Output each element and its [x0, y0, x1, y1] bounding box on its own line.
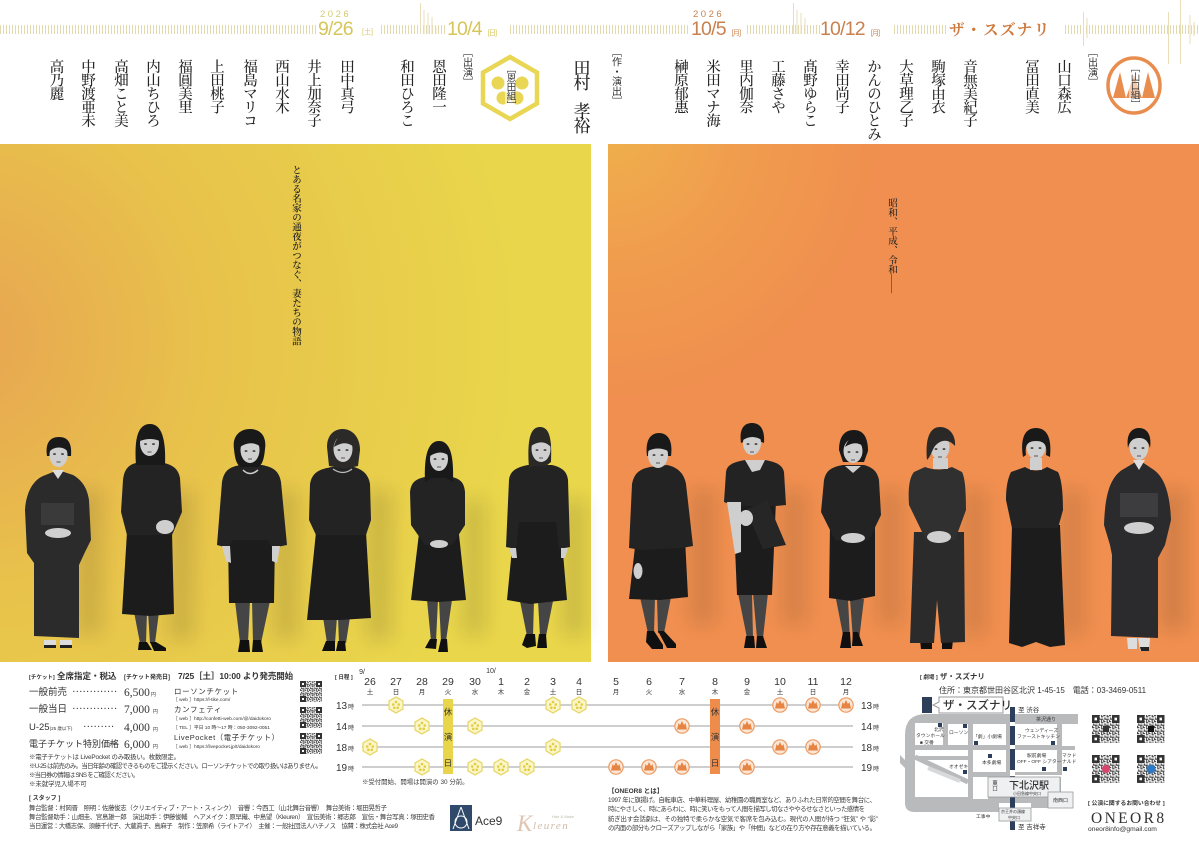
cast list: Yamaguchi team: 米田マナ海 — [704, 58, 720, 129]
map: south-west exit — [1048, 792, 1073, 808]
map: labels: ファーストキッチン — [1017, 734, 1060, 740]
map: labels: ウェンディーズ — [1025, 727, 1058, 734]
map: station: 小田急線中央口 — [1013, 790, 1041, 796]
schedule: date headers: 11 — [808, 676, 819, 688]
date: 10/4: 10/4 [日] — [447, 18, 497, 40]
schedule: closed day orange: 日 — [711, 758, 719, 768]
schedule: date headers: 27 — [390, 676, 402, 688]
ticket prices: U-25(25 歳以下) — [29, 722, 73, 733]
map: labels: ■ 交番 — [920, 739, 934, 746]
ticket prices: 7,000 円 — [124, 704, 158, 716]
schedule: closed day yellow: 休 — [444, 707, 453, 717]
cast list: Yamaguchi team: 山口森広 — [1055, 59, 1071, 115]
schedule: date headers: 6 — [646, 676, 652, 688]
schedule: date headers: 9 — [744, 676, 750, 688]
cast list: Onda team — [48, 47, 472, 128]
contact: oneor8info@gmail.com — [1088, 826, 1157, 833]
cast list: Onda team: 高畑こと美 — [112, 58, 128, 128]
schedule: closed day orange: 休 — [711, 707, 720, 717]
schedule: date headers: 火 — [646, 689, 653, 696]
map: venue callout — [933, 697, 1012, 713]
cast list: Yamaguchi team — [672, 47, 1098, 141]
schedule: date headers: 木 — [498, 687, 505, 696]
schedule: date headers: 8 — [712, 676, 718, 688]
map: station — [988, 777, 1060, 797]
date: 9/26 — [318, 9, 373, 40]
map: station: 下北沢駅 — [1009, 779, 1049, 792]
ticket vendors — [173, 687, 280, 750]
staff credits: 当日運営：大橋志保、須藤千代子、大蔵眞子、島麻子 制作：笠原希（ライトアイ） 主催：一般社団法人ハチノス 協賛：株式会社 Ace9 — [29, 821, 398, 830]
schedule: time labels: 13時 — [861, 701, 879, 712]
director name: given name: 孝裕 — [570, 102, 590, 134]
schedule: date headers: 29 — [442, 676, 454, 688]
ticket prices: 電子チケット特別価格 — [29, 738, 119, 749]
ticket vendors: ローソンチケット — [174, 687, 239, 696]
schedule: Yamaguchi team performances — [609, 698, 853, 774]
schedule: date headers: 金 — [744, 687, 751, 696]
map — [900, 697, 1078, 831]
ticket notes: ※当日券の情報は SNS をご確認ください。 — [29, 770, 139, 779]
schedule: date headers: 7 — [679, 676, 685, 688]
ticket QR codes — [300, 681, 322, 754]
about ONEOR8: 紡ぎ出す会話劇は、その独特で柔らかな空気で客席を包み込む。現代の人間が持つ “狂気” や “影” — [608, 814, 878, 823]
header: date and barcode strip — [0, 0, 1199, 64]
cast list: Yamaguchi team: 工藤さや — [769, 59, 785, 114]
venue info: 住所：東京都世田谷区北沢 1-45-15 電話：03-3469-0511 — [939, 685, 1147, 695]
ticket prices — [29, 671, 294, 751]
schedule: time labels: 18時 — [861, 743, 879, 754]
map: labels: ローソン — [949, 730, 968, 736]
schedule: note: ※受付開始、開場は開演の 30 分前。 — [362, 777, 469, 786]
ticket vendors: カンフェティ — [174, 705, 222, 714]
sponsor logo: Ace9 — [450, 805, 503, 831]
cast list: Onda team: 内山ちひろ — [144, 58, 160, 128]
figure 4: suit and long skirt — [307, 429, 392, 651]
schedule: date headers: 9/ — [359, 669, 365, 676]
map: Inokashira central exit — [999, 808, 1031, 821]
schedule: closed day yellow — [443, 699, 453, 774]
figure 5: short jacket dress — [410, 441, 486, 652]
cast list: Yamaguchi team: かんのひとみ — [865, 59, 881, 141]
ticket prices: 6,500円 — [124, 687, 156, 699]
schedule: date headers: 3 — [550, 676, 556, 688]
map: labels: 「劇」小劇場 — [973, 733, 1002, 740]
schedule: date headers: 1 — [498, 676, 504, 688]
sponsor logo: Kleuren — [516, 811, 575, 836]
schedule: date headers: 月 — [419, 688, 425, 696]
cast list: Yamaguchi team: 駒塚由衣 — [929, 59, 946, 114]
venue info — [920, 671, 1147, 695]
cast list: Yamaguchi team: 冨田直美 — [1023, 59, 1039, 114]
emblem: Yamaguchi team circle: ［山口組］ — [1128, 63, 1140, 109]
cast list: Onda team: 福圓美里 — [176, 58, 192, 114]
schedule: closed day yellow: 演 — [444, 732, 453, 742]
ticket notes: ※電子チケットは LivePocket のみ取扱い。枚数限定。 — [29, 752, 180, 761]
figure 7: suit — [629, 433, 716, 649]
date: 9/26: [土] — [362, 27, 373, 36]
about ONEOR8: 1997 年に旗揚げ。自転車店、中華料理屋、幼稚園の職員室など、ありふれた日常的空間を舞台に、 — [608, 795, 876, 804]
about ONEOR8: の内面の部分もクローズアップしながら「家族」や「仲間」などの在り方や存在意義を描いている。 — [608, 823, 876, 832]
cast list: Yamaguchi team: 大草理乙子 — [897, 59, 913, 128]
ticket prices: 一般前売 — [29, 686, 67, 698]
schedule: date headers: 木 — [712, 687, 719, 696]
venue name: ザ・スズナリ — [949, 21, 1051, 39]
social QR codes — [1092, 715, 1164, 783]
director label: ［作・演出］ — [610, 47, 622, 106]
date: 10/5: 2026 — [693, 9, 724, 20]
schedule: date headers — [359, 668, 852, 696]
ticket notes: ※U-25 は前売のみ。当日年齢の確認できるものをご提示ください。ローソンチケットでの取り扱いはありません。 — [29, 761, 322, 770]
ticket prices: 一般当日 — [29, 703, 67, 715]
ticket notes: ※未就学児入場不可 — [29, 779, 87, 788]
schedule: date headers: 日 — [810, 688, 816, 696]
cast list: Onda team: 中野渡亜未 — [79, 58, 95, 128]
map: labels: 至 吉祥寺 — [1018, 822, 1046, 831]
schedule: date headers: 10/ — [486, 668, 496, 675]
date: 10/12: 10/12 [月] — [820, 18, 880, 40]
catch copy: left: とある名家の通夜がつなぐ、妻たちの物語 — [290, 165, 302, 346]
map: labels: 駅前劇場 — [1027, 752, 1046, 759]
schedule: date headers: 日 — [393, 688, 399, 696]
ticket prices: •• — [110, 741, 117, 746]
figure 6: jacket dress — [506, 427, 586, 648]
cast list: Yamaguchi team: 髙野ゆらこ — [801, 58, 817, 127]
sponsor logo: Kleuren: Hair & Make — [552, 814, 575, 819]
about ONEOR8: 時にやさしく、時にあらわに、時に笑いをもって人間を描写し切なさややるせなさといった感情を — [608, 804, 865, 813]
figure 3: suit with pearls — [217, 429, 299, 652]
panel: yellow background — [0, 144, 591, 662]
cast list: Yamaguchi team: 幸田尚子 — [833, 58, 849, 114]
map: labels: オオゼキ — [949, 763, 968, 770]
contact: [ 公演に関するお問い合わせ ] — [1088, 799, 1165, 807]
schedule: date headers: 28 — [416, 676, 428, 688]
map: labels: 北沢 — [934, 726, 944, 733]
director name: 田村 — [570, 59, 590, 91]
map: labels: ナルド — [1062, 759, 1077, 765]
schedule: date headers: 土 — [777, 687, 784, 696]
schedule: time labels: 19時 — [336, 763, 354, 774]
schedule: date headers: 火 — [445, 689, 452, 696]
date: 9/26: 9/26 — [318, 18, 353, 40]
ticket prices: 7/25［土］10:00 より発売開始 — [178, 671, 294, 681]
schedule: date headers: 水 — [679, 687, 686, 696]
schedule: time labels: 14時 — [861, 722, 879, 733]
schedule: date headers: 土 — [550, 687, 557, 696]
schedule: time labels: 18時 — [336, 743, 354, 754]
cast list: Onda team: 和田ひろこ — [398, 59, 414, 127]
ticket prices: 4,000 円 — [124, 722, 158, 734]
cast list: Onda team: 恩田隆一 — [430, 59, 446, 113]
cast list: Onda team: 田中真弓 — [338, 59, 354, 114]
map: labels: 工事中 — [976, 813, 991, 820]
cast list: Onda team: 福島マリコ — [241, 58, 257, 126]
sponsor logo: Kleuren: leuren — [533, 820, 569, 832]
emblem: Onda team hexagon — [483, 57, 537, 119]
about ONEOR8 — [608, 787, 878, 832]
ticket prices: ••••••••••••• — [73, 689, 118, 694]
contact — [1088, 799, 1167, 833]
schedule: closed day yellow: 日 — [444, 758, 452, 768]
schedule: date headers: 日 — [576, 688, 582, 696]
map: labels: OFF・OFF シアター — [1017, 758, 1062, 765]
ticket vendors: ［ web ］http://confetti-web.com/@/daidokoro — [173, 715, 271, 722]
map: city blocks — [915, 723, 1078, 799]
emblem: Onda team hexagon: ［恩田組］ — [504, 64, 516, 110]
schedule: date headers: 12 — [840, 676, 852, 688]
ticket vendors: ［ TEL ］平日 10 時～17 時：050-3092-0051 — [173, 724, 270, 731]
figure 10: blouse and wide trousers — [909, 427, 986, 649]
figure 12: kimono — [1104, 428, 1186, 651]
schedule: time labels: 13時 — [336, 701, 354, 712]
schedule: date headers: 10 — [774, 676, 786, 688]
schedule: closed day orange — [710, 699, 720, 774]
schedule: date headers: 金 — [524, 687, 531, 696]
schedule: date headers: 月 — [843, 688, 849, 696]
venue info: [ 劇場 ] ザ・スズナリ — [920, 671, 985, 681]
staff credits: 舞台監督：村岡晋 照明：佐藤俊志（クリエイティブ・アート・スィンク） 音響：今西工（山北舞台音響） 舞台美術：堀田晃哲子 — [29, 803, 388, 812]
figures: yellow team — [25, 424, 586, 652]
map: labels: 本多劇場 — [982, 759, 1001, 766]
date: 9/26: 2026 — [320, 9, 351, 20]
map: labels: 至 渋谷 — [1018, 705, 1040, 714]
cast list: Onda team: ［出演］ — [460, 47, 472, 87]
sponsor logo: Kleuren: K — [516, 811, 534, 836]
figures: orange team — [629, 423, 1186, 651]
map: labels: マクド — [1062, 753, 1077, 759]
cast list: Onda team: 井上加奈子 — [305, 59, 321, 128]
schedule: closed day orange: 演 — [711, 732, 720, 742]
map: railway — [1010, 707, 1015, 830]
emblem: Yamaguchi team circle — [1108, 58, 1160, 113]
map: venue callout: ザ・スズナリ — [943, 698, 1012, 712]
map: labels — [916, 705, 1077, 831]
figure 9: buttoned jacket dress — [821, 430, 902, 648]
figure 8: short sleeve dress with bag — [724, 423, 806, 648]
ticket prices: ••••••••••••• — [73, 706, 118, 711]
schedule: date headers: 26 — [364, 676, 376, 688]
staff credits: [ スタッフ ] — [29, 794, 60, 802]
schedule: date headers: 月 — [613, 688, 619, 696]
ticket prices: [チケット] 全席指定・税込 — [29, 671, 117, 681]
about ONEOR8: 【ONEOR8 とは】 — [608, 787, 663, 795]
catch copy: right: 昭和、平成、令和―― — [886, 198, 898, 294]
staff credits: 舞台監督助手：山畑圭、宮島雄一郎 演出助手：伊藤俊輔 ヘアメイク：原早織、中島望（Kleuren） 宣伝美術：郷志郎 宣伝・舞台写真：塚田史香 — [29, 812, 436, 821]
schedule: date headers: 30 — [469, 676, 481, 688]
schedule chart — [335, 668, 879, 786]
map: south-west exit: 南西口 — [1053, 797, 1068, 804]
cast list: Onda team: 上田桃子 — [208, 59, 224, 114]
map: Inokashira central exit: 中央口 — [1008, 814, 1020, 820]
schedule: date headers: 4 — [576, 676, 582, 688]
figure 11: top and wide trousers — [1006, 428, 1084, 647]
cast list: Yamaguchi team: 榊原郁惠 — [672, 58, 688, 114]
cast list: Yamaguchi team: ［出演］ — [1086, 47, 1098, 87]
schedule: date headers: 2 — [524, 676, 530, 688]
ticket prices: 6,000 円 — [124, 739, 158, 751]
ticket vendors: LivePocket（電子チケット） — [174, 733, 280, 742]
figure 2: jacket and long skirt — [121, 424, 194, 651]
ticket prices: [チケット発売日] — [124, 673, 170, 681]
schedule: date headers: 土 — [367, 687, 374, 696]
schedule: time labels — [336, 701, 879, 774]
schedule: date headers: 水 — [472, 687, 479, 696]
schedule: date headers: 5 — [613, 676, 619, 688]
date: 10/5: 10/5 [月] — [691, 18, 741, 40]
schedule chart: [ 日程 ] — [335, 673, 353, 681]
schedule: rows — [362, 705, 853, 767]
map: Inokashira central exit: 京王井の頭線 — [1001, 808, 1025, 814]
ticket notes — [29, 752, 322, 788]
map: labels: 茶沢通り — [1036, 716, 1056, 723]
figure 1: kimono — [25, 437, 102, 648]
panel: orange background — [608, 144, 1199, 662]
cast list: Onda team: 高乃麗 — [48, 58, 64, 101]
cast list: Yamaguchi team: 里内伽奈 — [737, 59, 753, 114]
map: road area — [905, 714, 1078, 812]
schedule: Onda team performances — [363, 697, 586, 775]
map: station: 東口 — [991, 779, 998, 792]
ticket vendors: ［ web ］https://livepocket.jp/t/daidokoro — [173, 743, 260, 750]
map: venue marker — [922, 697, 932, 713]
staff credits — [29, 794, 436, 830]
sponsor logo: Ace9: Ace9 — [475, 814, 503, 828]
ticket prices: ••••••••• — [84, 724, 115, 729]
contact: ONEOR8 — [1091, 810, 1167, 827]
map: labels: タウンホール — [916, 732, 945, 739]
date: 10/5 — [691, 9, 741, 40]
cast list: Onda team: 西山水木 — [273, 59, 289, 114]
schedule: time labels: 14時 — [336, 722, 354, 733]
cast list: Yamaguchi team: 音無美紀子 — [961, 58, 977, 128]
ticket vendors: ［ web ］https://l-tike.com/ — [173, 696, 231, 703]
schedule: time labels: 19時 — [861, 763, 879, 774]
